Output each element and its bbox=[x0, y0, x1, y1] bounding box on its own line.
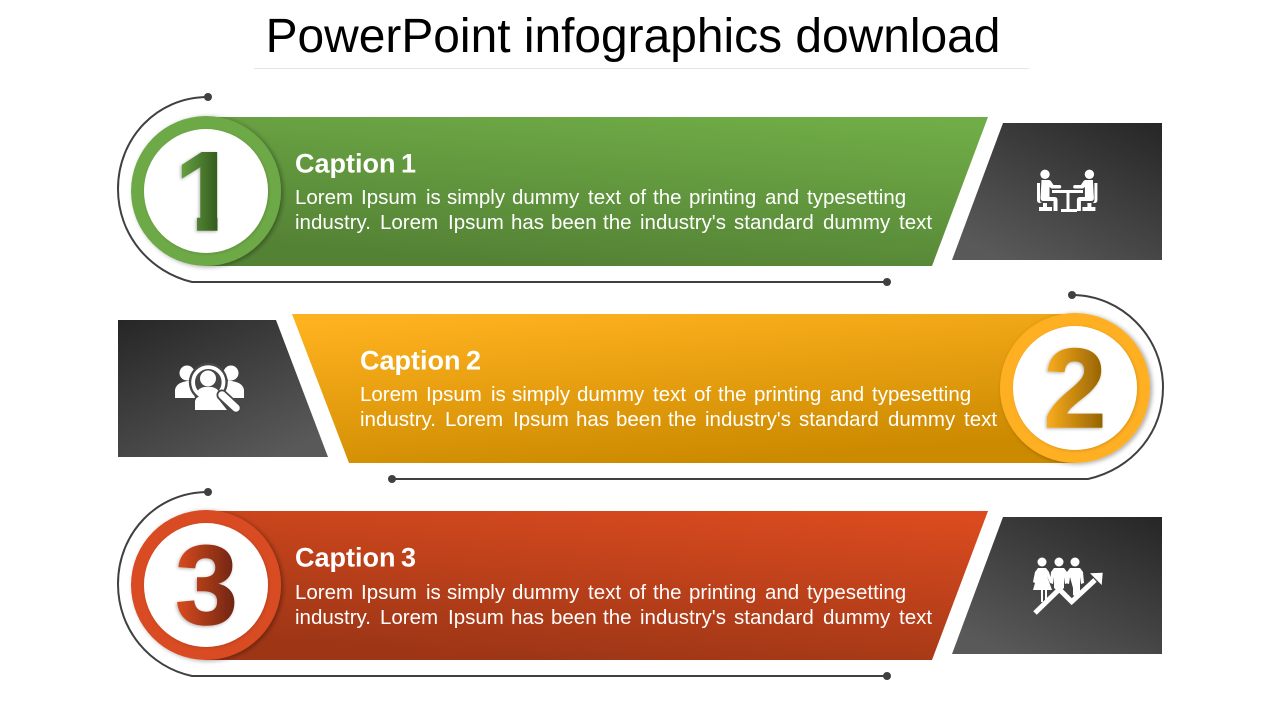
dark icon panel 3 bbox=[952, 517, 1162, 654]
caption 3 body text: is bbox=[426, 581, 441, 604]
caption 1 body text: has bbox=[511, 211, 544, 234]
caption 3 body text: Ipsum bbox=[448, 606, 504, 629]
number badge 3 bbox=[131, 510, 281, 660]
caption 1 body text: Lorem bbox=[380, 211, 438, 234]
title: PowerPoint infographics download bbox=[266, 10, 1000, 63]
caption 3 body text: text bbox=[899, 606, 932, 629]
caption 3 body text: dummy bbox=[512, 581, 580, 604]
caption 1 body text: text bbox=[588, 186, 621, 209]
caption 3 body text: Ipsum bbox=[361, 581, 417, 604]
caption 2 body text: standard bbox=[799, 408, 879, 431]
caption 2 body text: dummy bbox=[888, 408, 956, 431]
caption 3 body text: simply bbox=[447, 581, 506, 604]
caption 2 body text: industry. bbox=[360, 408, 436, 431]
caption 2 body text: text bbox=[964, 408, 997, 431]
caption 1 body text: printing bbox=[689, 186, 756, 209]
red banner bbox=[206, 511, 988, 660]
caption 2 body text: simply bbox=[512, 383, 571, 406]
caption 3 body text: text bbox=[588, 581, 621, 604]
caption 1 body text: Lorem bbox=[295, 186, 353, 209]
caption 2 body text: Lorem bbox=[360, 383, 418, 406]
caption 1 body text: is bbox=[426, 186, 441, 209]
caption 2 heading: 2 bbox=[466, 346, 481, 376]
icon: team with rising arrow bbox=[1033, 558, 1103, 613]
caption 3 heading: Caption bbox=[295, 542, 396, 572]
dark icon panel 2 bbox=[118, 320, 328, 457]
caption 2 body text: dummy bbox=[577, 383, 645, 406]
number badge 2 bbox=[1000, 313, 1150, 463]
icon: people under magnifying glass bbox=[175, 363, 244, 410]
caption 2 heading: Caption bbox=[360, 346, 460, 376]
caption 2 body text: of bbox=[694, 383, 711, 406]
caption 3 body text: Lorem bbox=[380, 606, 438, 629]
caption 3 body text: the bbox=[653, 581, 682, 604]
caption 3 body text: of bbox=[629, 581, 646, 604]
caption 2 body text: the bbox=[718, 383, 746, 406]
connector line 1 bbox=[118, 93, 891, 286]
caption 2 body text: printing bbox=[754, 383, 821, 406]
caption 1 body text: the bbox=[653, 186, 682, 209]
caption 2 body text: Ipsum bbox=[513, 408, 569, 431]
caption 2 body text: been bbox=[616, 408, 662, 431]
orange banner bbox=[292, 314, 1075, 463]
caption 3 body text: industry's bbox=[640, 606, 726, 629]
caption 1 body text: Ipsum bbox=[361, 186, 417, 209]
caption 3 body text: has bbox=[511, 606, 544, 629]
panel: caption 2 bbox=[118, 291, 1163, 483]
caption 2 body text: text bbox=[653, 383, 686, 406]
panel: caption 3 bbox=[118, 488, 1162, 680]
caption 2 body text: typesetting bbox=[872, 383, 971, 406]
caption 2 body text: industry's bbox=[705, 408, 791, 431]
caption 3 body text: dummy bbox=[823, 606, 891, 629]
caption 1 heading: Caption bbox=[295, 148, 396, 178]
caption 3 body text: been bbox=[551, 606, 597, 629]
caption 1 body text: dummy bbox=[512, 186, 580, 209]
caption 1 body text: of bbox=[629, 186, 646, 209]
caption 3 body text: printing bbox=[689, 581, 756, 604]
caption 1 body text: dummy bbox=[823, 211, 891, 234]
caption 1 body text: Ipsum bbox=[448, 211, 504, 234]
caption 1 body text: industry's bbox=[640, 211, 726, 234]
caption 2 body text: Lorem bbox=[445, 408, 503, 431]
icon: two people at a table bbox=[1037, 170, 1097, 212]
caption 2 body text: is bbox=[491, 383, 506, 406]
caption 1 heading: 1 bbox=[401, 148, 416, 178]
number badge 1: 1 bbox=[175, 129, 237, 254]
connector line 3 bbox=[118, 488, 891, 680]
caption 3 heading: 3 bbox=[401, 542, 416, 572]
green banner bbox=[206, 117, 988, 266]
caption 3 body text: industry. bbox=[295, 606, 371, 629]
caption 1 body text: industry. bbox=[295, 211, 371, 234]
caption 2 body text: the bbox=[668, 408, 696, 431]
caption 3 body text: standard bbox=[734, 606, 814, 629]
caption 1 body text: standard bbox=[734, 211, 814, 234]
number badge 3: 3 bbox=[175, 522, 238, 648]
panel: caption 1 bbox=[118, 93, 1162, 286]
caption 1 body text: simply bbox=[447, 186, 506, 209]
dark icon panel 1 bbox=[952, 123, 1162, 260]
caption 2 body text: has bbox=[576, 408, 609, 431]
number badge 2: 2 bbox=[1044, 326, 1106, 451]
caption 1 body text: been bbox=[551, 211, 597, 234]
connector line 2 bbox=[388, 291, 1163, 483]
caption 2 body text: Ipsum bbox=[426, 383, 482, 406]
caption 3 body text: and bbox=[765, 581, 799, 604]
caption 3 body text: typesetting bbox=[807, 581, 906, 604]
caption 1 body text: the bbox=[603, 211, 632, 234]
caption 1 body text: and bbox=[765, 186, 799, 209]
caption 3 body text: Lorem bbox=[295, 581, 353, 604]
number badge 1 bbox=[131, 116, 281, 266]
caption 1 body text: text bbox=[899, 211, 932, 234]
caption 2 body text: and bbox=[830, 383, 864, 406]
caption 3 body text: the bbox=[603, 606, 632, 629]
caption 1 body text: typesetting bbox=[807, 186, 906, 209]
